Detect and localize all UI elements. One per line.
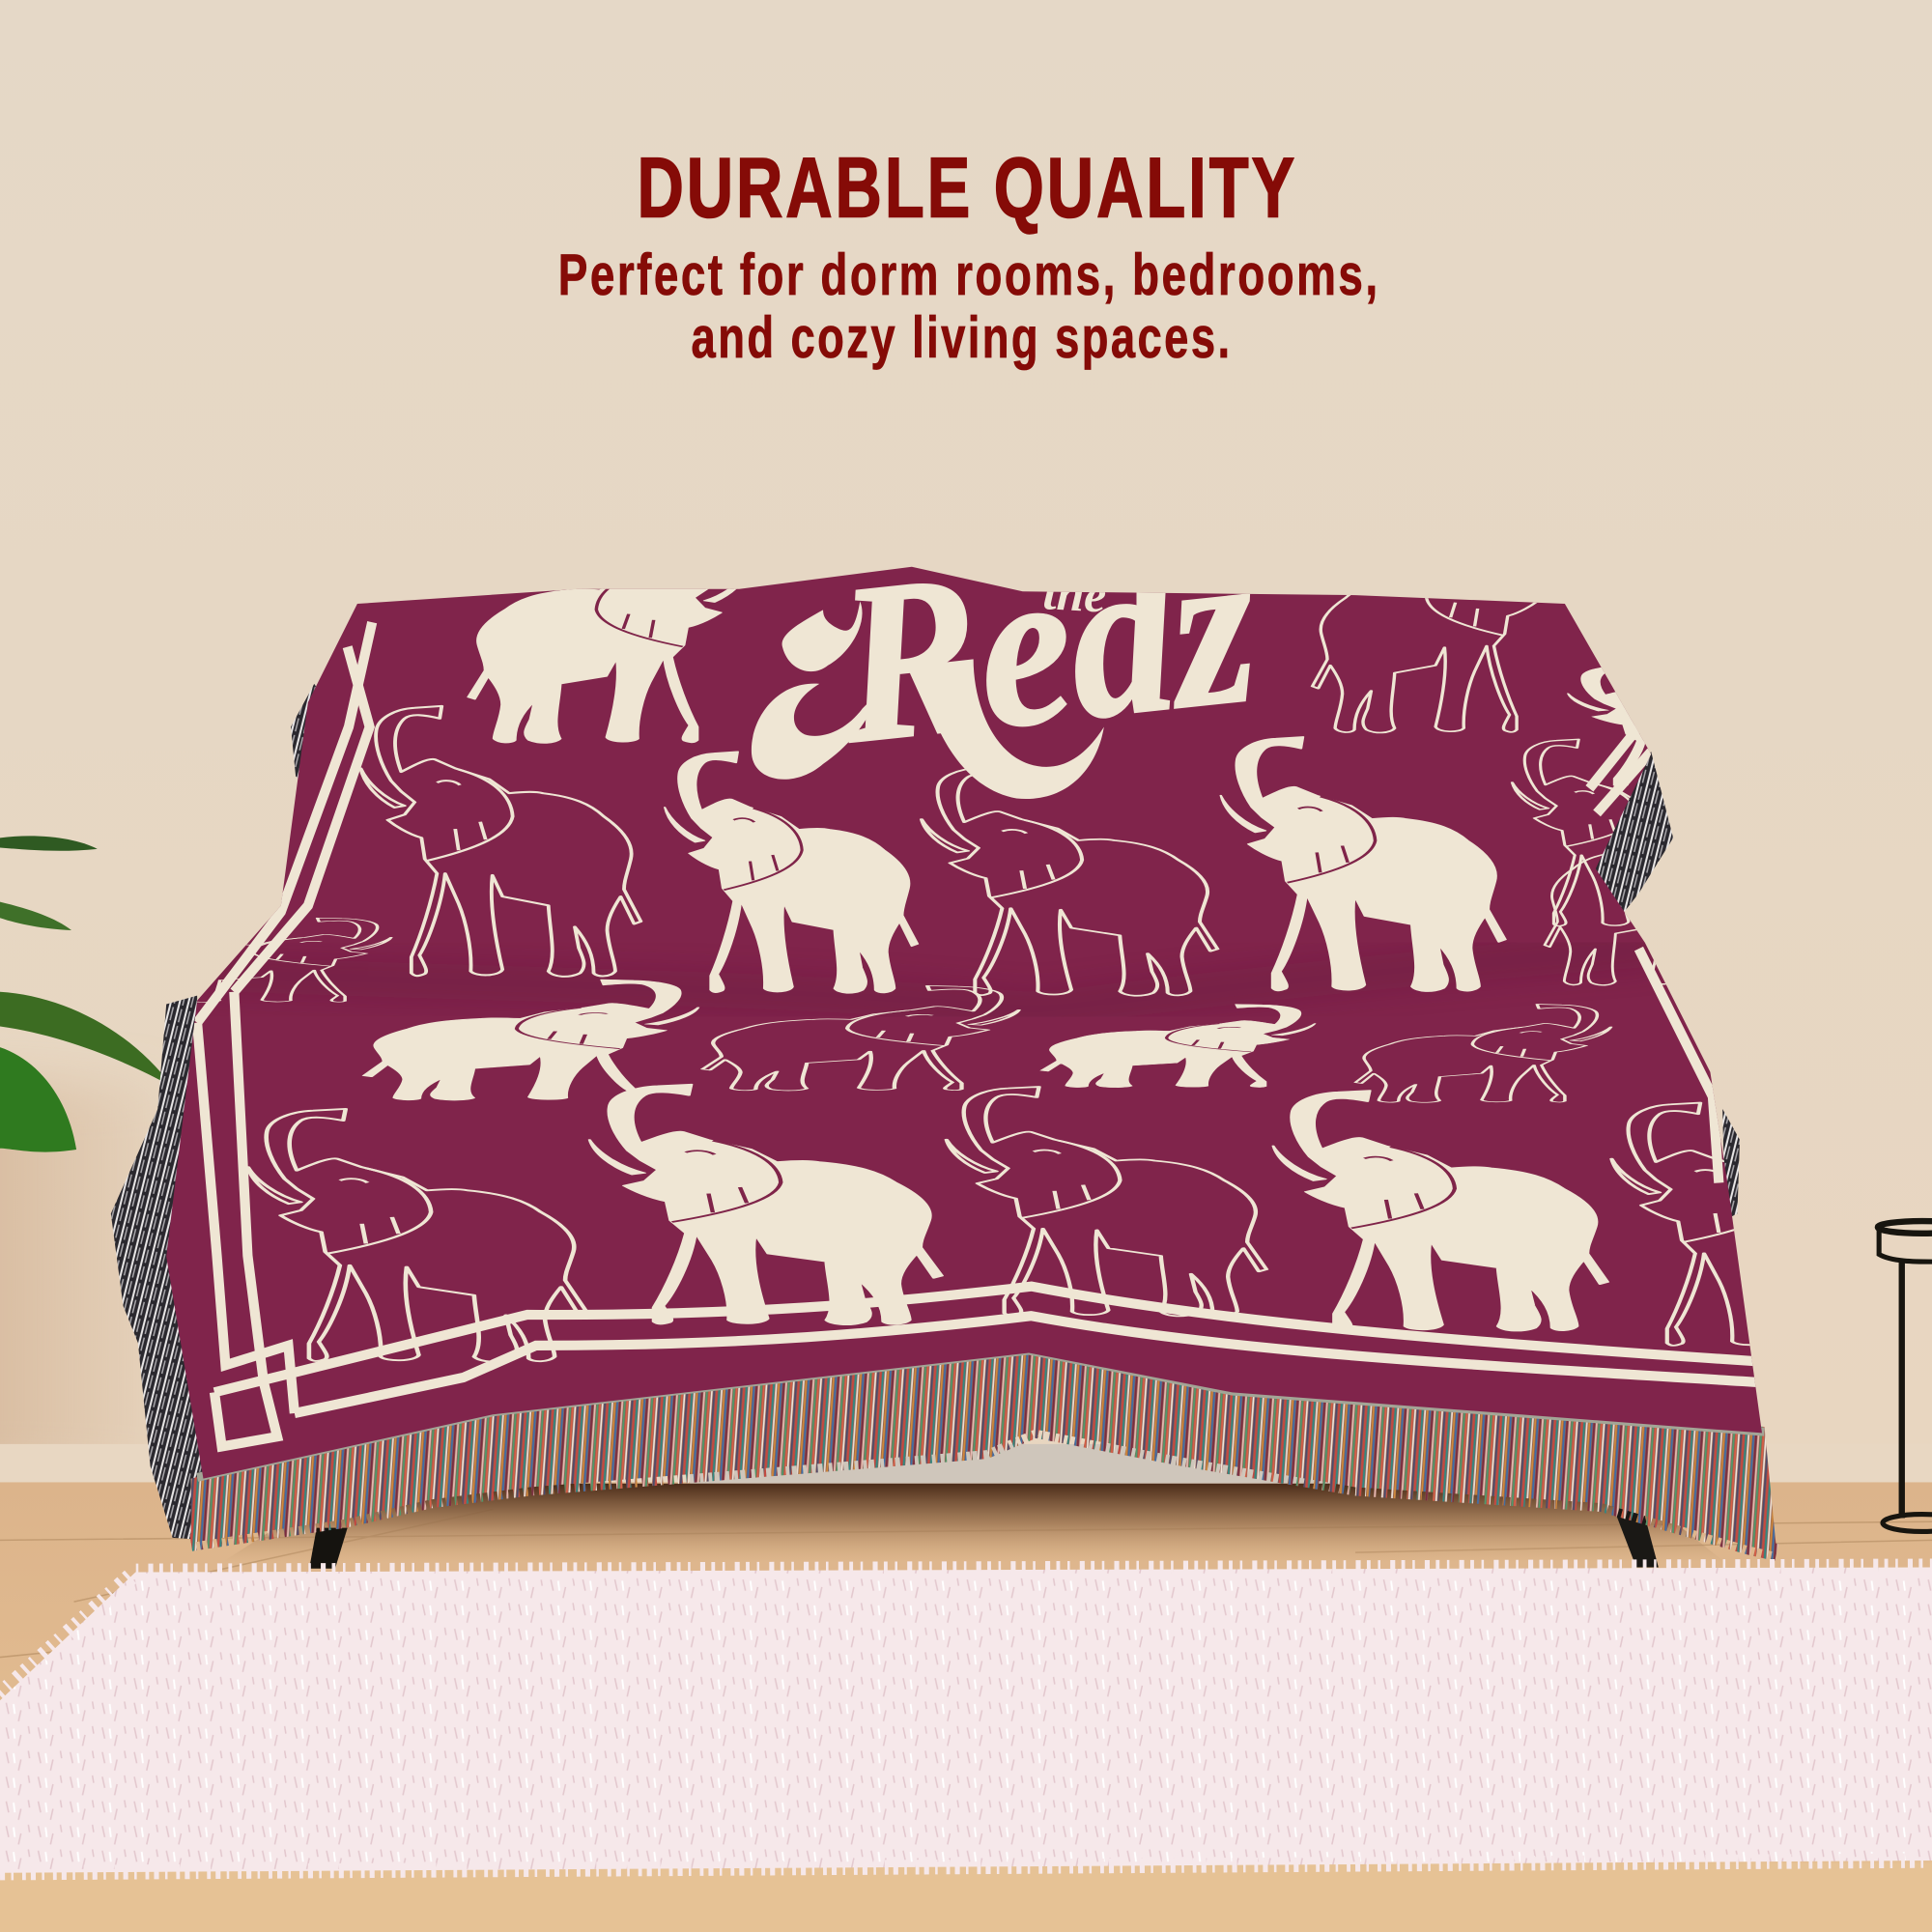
blanket brand wordmark: Redz	[828, 497, 1265, 792]
blanket brand wordmark: the	[1041, 566, 1107, 623]
title: DURABLE QUALITY	[637, 139, 1297, 235]
wall background	[0, 0, 1932, 1491]
subtitle line 1: Perfect for dorm rooms, bedrooms,	[558, 242, 1380, 307]
cream border lines	[197, 622, 1762, 1446]
plant leaves	[0, 836, 173, 1152]
baseboard	[0, 1444, 1932, 1484]
side table	[1878, 1221, 1932, 1531]
elephant row 1	[468, 505, 1824, 787]
sofa leg left	[309, 1528, 348, 1569]
elephant row 4	[248, 1084, 1918, 1362]
blanket brand wordmark	[752, 583, 1250, 799]
sofa shadow and base	[222, 1444, 1725, 1562]
subtitle line 2: and cozy living spaces.	[692, 305, 1233, 370]
elephant pattern	[135, 497, 1918, 1446]
sofa leg right	[1608, 1493, 1659, 1567]
wooden floor	[0, 1482, 1932, 1932]
fabric fold shading	[210, 604, 1663, 1350]
elephant row 2	[360, 706, 1759, 996]
shaggy pink rug	[0, 1567, 1932, 1873]
multicolour bottom fringe	[191, 1346, 1776, 1552]
elephant row 3 on seat fold	[135, 918, 1611, 1102]
throw blanket	[166, 566, 1762, 1479]
blanket fabric	[166, 567, 1762, 1479]
black and white side fringe	[111, 684, 1740, 1540]
